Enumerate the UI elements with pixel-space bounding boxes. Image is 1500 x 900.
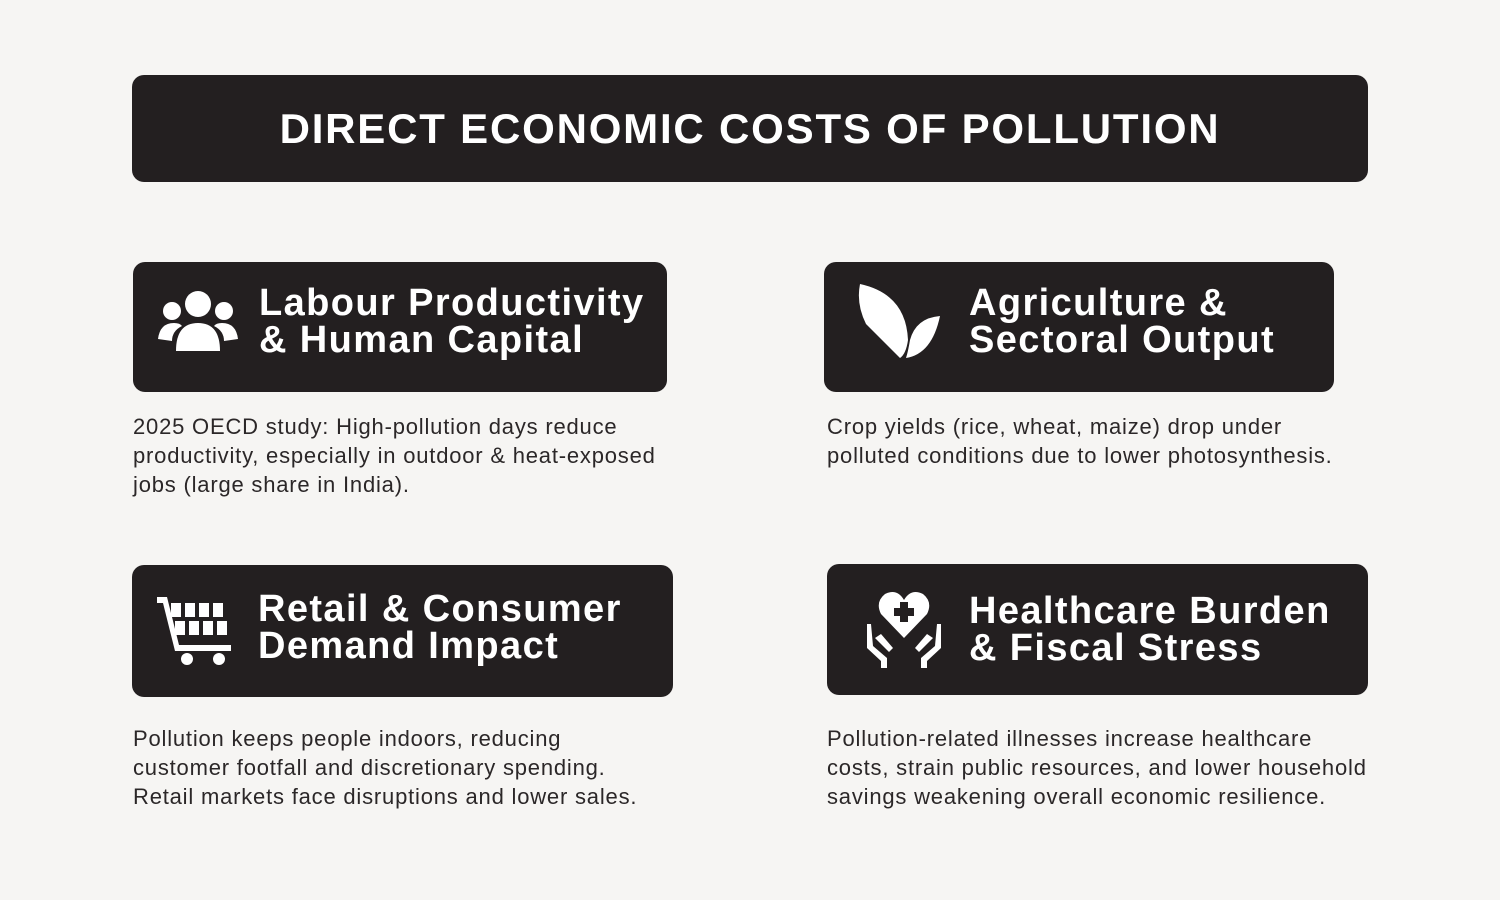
text: healthcare: savings weakening overall economic resilience.: [827, 784, 1326, 809]
heading: Demand Impact: [258, 625, 559, 667]
text: agriculture: Crop yields (rice, wheat, maize) drop under: [827, 414, 1282, 439]
text: healthcare: Pollution-related illnesses increase healthcare: [827, 726, 1312, 751]
heading: [969, 282, 1275, 361]
text: retail: Retail markets face disruptions and lower sales.: [133, 784, 637, 809]
heading: Agriculture &: [969, 282, 1228, 324]
text: labour: productivity, especially in outdoor & heat-exposed: [133, 443, 656, 468]
icon: people: [158, 291, 238, 351]
panel: healthcare: [827, 564, 1368, 695]
text: retail: [133, 726, 637, 809]
text: agriculture: polluted conditions due to lower photosynthesis.: [827, 443, 1333, 468]
heading: Retail & Consumer: [258, 588, 622, 630]
text: retail: Pollution keeps people indoors, reducing: [133, 726, 561, 751]
text: healthcare: costs, strain public resources, and lower household: [827, 755, 1367, 780]
text: labour: [132, 414, 656, 497]
text: retail: customer footfall and discretionary spending.: [133, 755, 606, 780]
icon: leaves: [858, 284, 940, 358]
title: [132, 75, 1368, 182]
heading: Healthcare Burden: [969, 590, 1331, 632]
heading: Sectoral Output: [969, 319, 1275, 361]
panel: retail: [132, 565, 673, 697]
panel: labour: [133, 262, 667, 392]
heading: Labour Productivity: [259, 282, 645, 324]
heading: [969, 590, 1331, 669]
heading: [258, 588, 622, 667]
heading: & Fiscal Stress: [969, 627, 1262, 669]
title: DIRECT ECONOMIC COSTS OF POLLUTION: [280, 104, 1220, 152]
icon: heart in hands: [867, 592, 941, 668]
heading: & Human Capital: [259, 319, 584, 361]
text: healthcare: [827, 726, 1367, 809]
heading: [259, 282, 645, 361]
panel: agriculture: [824, 262, 1334, 392]
icon: cart: [157, 597, 231, 665]
text: agriculture: [827, 414, 1333, 468]
text: labour: jobs (large share in India).: [133, 472, 410, 497]
text: labour: 2025 OECD study: High-pollution days reduce: [133, 414, 617, 439]
